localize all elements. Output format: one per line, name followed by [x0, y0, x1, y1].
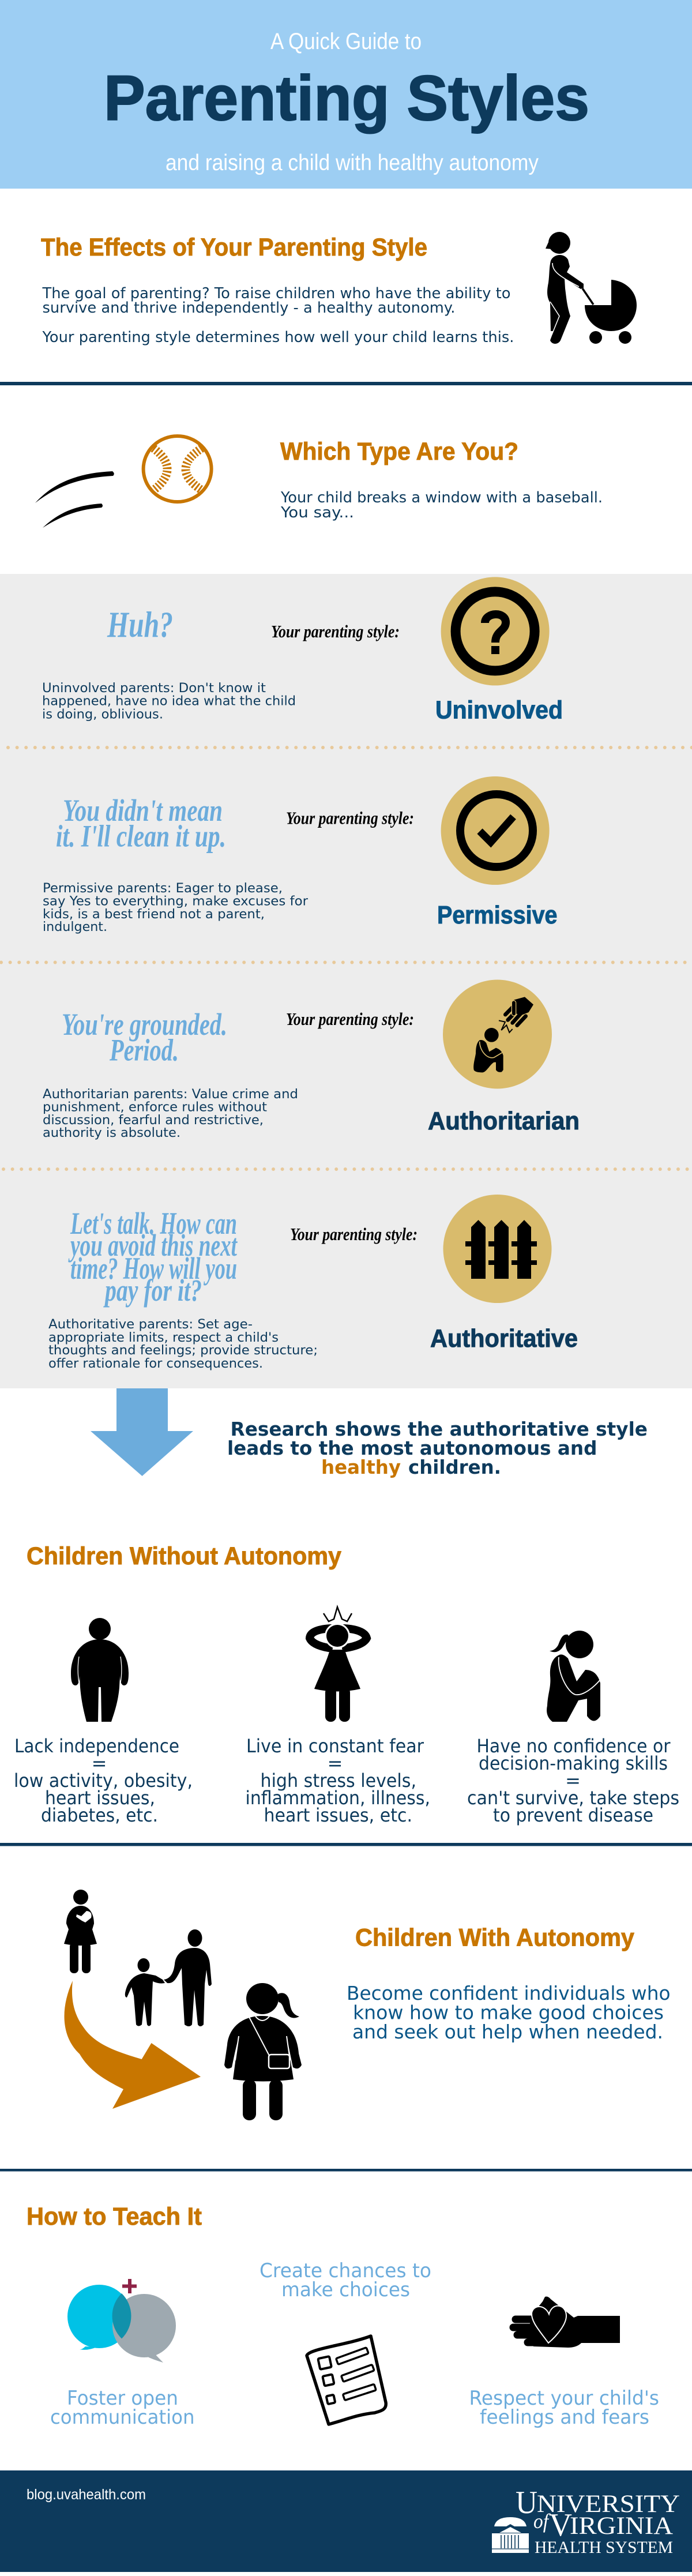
- description: Uninvolved parents: Don't know it: [42, 681, 266, 696]
- body text: [42, 285, 514, 346]
- heading: Children Without Autonomy: [27, 1542, 341, 1570]
- quote: you avoid this next: [68, 1228, 238, 1263]
- header banner: [0, 0, 692, 189]
- research callout: [227, 1418, 648, 1478]
- logo wordmark: of: [533, 2510, 551, 2533]
- column: no confidence: Have no confidence or: [476, 1735, 671, 1757]
- research callout: Research shows the authoritative style: [231, 1418, 648, 1440]
- footer: [0, 2470, 692, 2572]
- section: children without autonomy: [14, 1542, 679, 1826]
- icon: girl with bag: [224, 1983, 302, 2120]
- logo wordmark: IRGINIA: [570, 2513, 673, 2540]
- style: permissive: [43, 776, 557, 934]
- quote: [62, 1007, 227, 1067]
- body text: Become confident individuals who: [347, 1982, 670, 2004]
- description: authority is absolute.: [43, 1126, 180, 1140]
- parenting style caption: Your parenting style:: [286, 1009, 414, 1029]
- style name: Authoritarian: [428, 1107, 580, 1135]
- description: punishment, enforce rules without: [43, 1101, 267, 1114]
- body text: and seek out help when needed.: [352, 2021, 663, 2043]
- section: children with autonomy: [64, 1890, 670, 2120]
- label: respect feelings: [469, 2387, 659, 2429]
- style name: Uninvolved: [435, 696, 563, 724]
- arrow: down: [91, 1388, 193, 1476]
- column: constant fear: Live in constant fear: [246, 1735, 424, 1757]
- column: no confidence: to prevent disease: [493, 1804, 653, 1826]
- icon: mother with stroller: [546, 232, 637, 344]
- website: blog.uvahealth.com: [27, 2487, 146, 2503]
- section: which type are you: [35, 436, 603, 528]
- style name: Authoritative: [430, 1324, 578, 1353]
- description: say Yes to everything, make excuses for: [43, 894, 309, 909]
- column: lack independence: low activity, obesity,: [14, 1770, 193, 1792]
- icon: mother holding baby: [64, 1890, 97, 1973]
- description: [48, 1317, 318, 1371]
- quote: pay for it?: [103, 1273, 202, 1308]
- label: foster communication: Foster open: [67, 2387, 178, 2410]
- research callout: leads to the most autonomous and: [227, 1437, 597, 1459]
- label: respect feelings: feelings and fears: [480, 2406, 649, 2429]
- icon: baseball with motion lines: [35, 436, 212, 528]
- icon: father and child: [125, 1929, 212, 2026]
- icon: hand holding heart: [513, 2297, 620, 2348]
- subtitle: and raising a child with healthy autonomy: [166, 151, 539, 175]
- quote: [56, 793, 226, 854]
- heading: Children With Autonomy: [355, 1924, 634, 1952]
- quote: Period.: [109, 1032, 179, 1067]
- section: effects of parenting style: [41, 232, 637, 346]
- column: constant fear: [246, 1735, 430, 1826]
- style: authoritarian: [43, 979, 580, 1140]
- quote: it. I'll clean it up.: [56, 819, 226, 854]
- icon: fence badge: [443, 1195, 551, 1303]
- quote: You didn't mean: [63, 793, 223, 828]
- logo wordmark: HEALTH SYSTEM: [535, 2538, 673, 2557]
- research callout: healthy: [321, 1456, 401, 1478]
- heading: Which Type Are You?: [280, 438, 518, 465]
- description: [43, 881, 309, 934]
- quote: You're grounded.: [62, 1007, 227, 1042]
- description: indulgent.: [43, 920, 107, 934]
- column: no confidence: =: [565, 1770, 581, 1792]
- kicker: A Quick Guide to: [270, 29, 422, 54]
- quote: [68, 1206, 238, 1308]
- icon: checklist: [307, 2336, 386, 2424]
- description: thoughts and feelings; provide structure;: [48, 1343, 318, 1358]
- label: create chances: Create chances to: [260, 2259, 431, 2282]
- column: lack independence: heart issues,: [45, 1787, 155, 1809]
- description: is doing, oblivious.: [42, 707, 163, 722]
- logo wordmark: U: [516, 2485, 537, 2521]
- icon: hand over cowering child badge: [443, 979, 552, 1089]
- quote: Let's talk. How can: [70, 1206, 237, 1241]
- prompt text: You say...: [280, 504, 354, 521]
- column: no confidence: can't survive, take steps: [467, 1787, 679, 1809]
- description: [43, 1087, 298, 1140]
- heading: How to Teach It: [27, 2203, 202, 2230]
- column: lack independence: =: [92, 1752, 107, 1774]
- parenting style caption: Your parenting style:: [286, 808, 414, 828]
- panel: parenting styles: [0, 574, 692, 1388]
- arrow: curved: [64, 1981, 201, 2109]
- column: constant fear: high stress levels,: [261, 1770, 416, 1792]
- column: no confidence: decision-making skills: [479, 1752, 668, 1774]
- column: lack independence: diabetes, etc.: [41, 1804, 158, 1826]
- body text: [347, 1982, 670, 2043]
- style: authoritative: [48, 1195, 578, 1371]
- logo wordmark: V: [549, 2507, 572, 2543]
- description: discussion, fearful and restrictive,: [43, 1113, 264, 1128]
- label: create chances: [260, 2259, 431, 2301]
- style name: Permissive: [437, 901, 557, 929]
- label: foster communication: [50, 2387, 195, 2429]
- body text: know how to make good choices: [353, 2002, 664, 2023]
- label: respect feelings: Respect your child's: [469, 2387, 659, 2410]
- research callout: children.: [408, 1456, 501, 1478]
- quote: time? How will you: [70, 1251, 237, 1286]
- prompt text: [280, 489, 603, 521]
- body text: Your parenting style determines how well your child learns this.: [42, 329, 514, 346]
- icon: speech bubbles: [67, 2279, 176, 2363]
- parenting style caption: Your parenting style:: [290, 1224, 418, 1244]
- description: Permissive parents: Eager to please,: [43, 881, 283, 896]
- column: lack independence: Lack independence: [14, 1735, 179, 1757]
- heading: The Effects of Your Parenting Style: [41, 234, 427, 261]
- column: constant fear: inflammation, illness,: [246, 1787, 430, 1809]
- logo wordmark: NIVERSITY: [537, 2491, 680, 2518]
- body text: The goal of parenting? To raise children who have the ability to: [42, 285, 511, 302]
- description: Authoritative parents: Set age-: [48, 1317, 253, 1332]
- parenting style caption: Your parenting style:: [271, 621, 400, 641]
- column: no confidence: [467, 1735, 679, 1826]
- column: constant fear: =: [328, 1752, 343, 1774]
- icon: question mark badge: [441, 577, 550, 685]
- icon: check mark badge: [441, 776, 550, 885]
- body text: survive and thrive independently - a healthy autonomy.: [43, 299, 456, 317]
- description: offer rationale for consequences.: [48, 1357, 263, 1371]
- description: [42, 681, 296, 722]
- logo dome: [492, 2517, 529, 2553]
- description: happened, have no idea what the child: [42, 694, 296, 708]
- icon: obese child: [71, 1618, 129, 1722]
- prompt text: Your child breaks a window with a baseball.: [280, 489, 603, 506]
- logo wordmark: [516, 2485, 680, 2557]
- icon: sad child: [547, 1631, 600, 1722]
- column: constant fear: heart issues, etc.: [264, 1804, 412, 1826]
- label: create chances: make choices: [281, 2278, 410, 2301]
- label: foster communication: communication: [50, 2406, 195, 2429]
- description: appropriate limits, respect a child's: [48, 1331, 279, 1345]
- title: Parenting Styles: [104, 63, 589, 134]
- style: uninvolved: [42, 577, 563, 724]
- quote: Huh?: [107, 604, 173, 645]
- description: kids, is a best friend not a parent,: [43, 907, 265, 922]
- section: how to teach it: [27, 2203, 659, 2429]
- description: Authoritarian parents: Value crime and: [43, 1087, 298, 1102]
- icon: fearful child: [310, 1607, 367, 1722]
- column: lack independence: [14, 1735, 193, 1826]
- UVA Health System logo: [492, 2485, 680, 2557]
